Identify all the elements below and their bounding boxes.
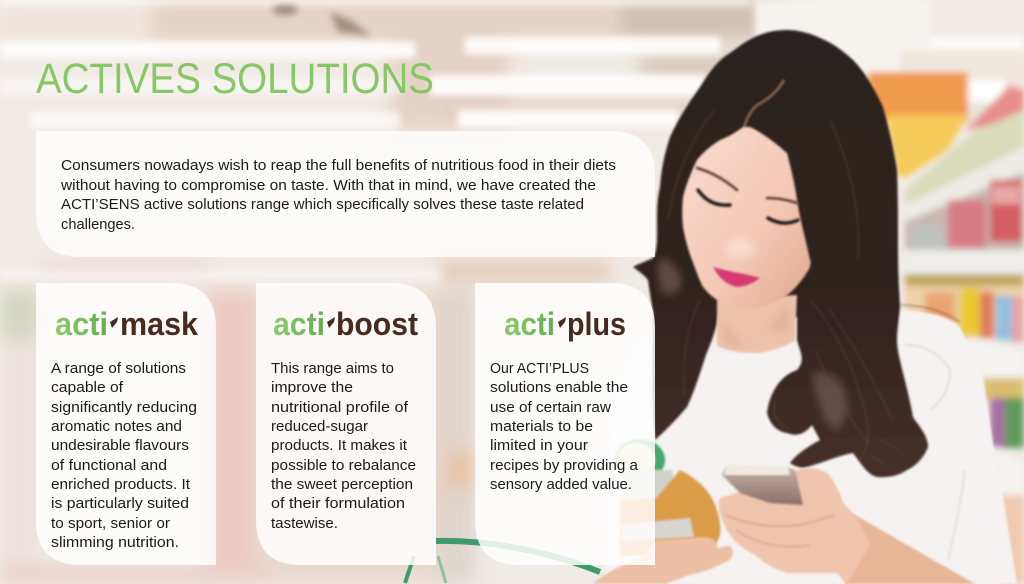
shirt (602, 310, 1017, 584)
left hair highlight (658, 258, 682, 295)
intro text: Consumers nowadays wish to reap the full benefits of nutritious food in their diets (61, 157, 616, 174)
text: plus description: materials to be (490, 418, 593, 435)
title: ACTIVES SOLUTIONS (36, 55, 434, 103)
text: boost description: the sweet perception (271, 476, 413, 493)
neck (717, 295, 797, 353)
shirt folds (948, 470, 965, 560)
text: mask description: slimming nutrition. (51, 534, 179, 551)
hair (633, 30, 928, 477)
finger lines (725, 515, 835, 547)
hand holding bottle (592, 537, 733, 584)
panel: acti'mask (36, 283, 216, 565)
parting (744, 80, 784, 128)
text: mask description: is particularly suited (51, 495, 189, 512)
text: mask description: of functional and (51, 457, 167, 474)
bottle (615, 439, 720, 556)
text: mask description: undesirable flavours (51, 437, 189, 454)
lips (713, 267, 760, 287)
intro text: without having to compromise on taste. With that in mind, we have created the (60, 177, 596, 194)
logo: acti'boost: acti (273, 306, 325, 342)
logo: acti'plus: plus (567, 306, 626, 342)
logo: acti'boost: boost (336, 306, 418, 342)
text: boost description: improve the (271, 379, 353, 396)
text: boost description: of their formulation (271, 495, 405, 512)
hair gap showing shirt (812, 372, 848, 432)
logo: acti'mask: mask (120, 306, 198, 342)
logo: acti'mask: acti (55, 306, 108, 342)
text: boost description: possible to rebalance (271, 457, 416, 474)
hair strands (668, 110, 960, 465)
panel: acti'plus (475, 283, 655, 565)
brows and eyes (697, 168, 798, 223)
text: plus description: Our ACTI’PLUS (490, 360, 589, 377)
photo: woman with bottle and phone (592, 30, 1017, 584)
intro text: ACTI’SENS active solutions range which specifically solves these taste related (61, 196, 584, 213)
intro text (60, 157, 616, 233)
text: plus description: solutions enable the (490, 379, 628, 396)
hand holding phone (719, 468, 870, 584)
text: mask description: aromatic notes and (51, 418, 182, 435)
text: boost description: This range aims to (271, 360, 394, 377)
text: boost description: nutritional profile of (271, 399, 409, 416)
logo: acti'plus: acti (504, 306, 555, 342)
text: plus description: use of certain raw (490, 399, 611, 416)
text: boost description: tastewise. (271, 515, 338, 532)
logo: acti'mask (55, 306, 198, 342)
nose (724, 236, 756, 257)
text: plus description (490, 360, 639, 493)
shopping cart handle (405, 541, 600, 583)
text: boost description: products. It makes it (271, 437, 408, 454)
face (682, 127, 811, 308)
text: plus description: sensory added value. (490, 476, 632, 493)
text: mask description: significantly reducing (51, 399, 197, 416)
neck shadow (722, 300, 790, 347)
intro text: challenges. (61, 216, 135, 233)
text: mask description: to sport, senior or (51, 515, 170, 532)
panel: introduction (36, 131, 655, 257)
phone (722, 465, 803, 505)
forearm (845, 512, 975, 584)
text: boost description: reduced-sugar (271, 418, 368, 435)
logo: acti'boost (273, 306, 418, 342)
text: mask description: A range of solutions (51, 360, 186, 377)
text: plus description: limited in your (490, 437, 588, 454)
panel: acti'boost (256, 283, 436, 565)
text: mask description: capable of (51, 379, 124, 396)
text: plus description: recipes by providing a (490, 457, 639, 474)
text: mask description (51, 360, 197, 551)
text: boost description (271, 360, 416, 532)
logo: acti'plus (504, 306, 626, 342)
text: mask description: enriched products. It (51, 476, 191, 493)
